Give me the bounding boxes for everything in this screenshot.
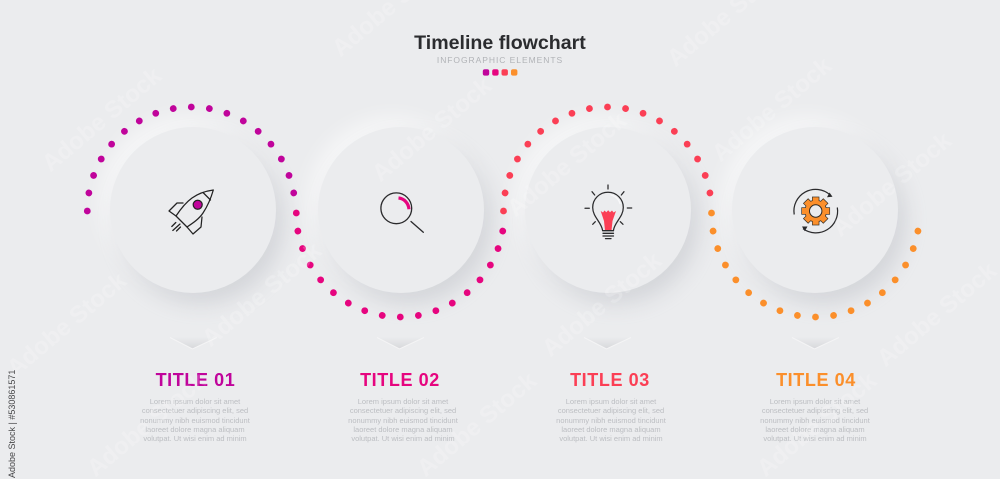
chevron [377, 338, 424, 349]
watermarks: Adobe Stock [82, 367, 212, 479]
step 2 [326, 130, 496, 443]
icon: light bulb [584, 184, 632, 240]
body text: laoreet dolore magna aliquam [765, 425, 865, 434]
title 04: TITLE 04 [776, 370, 856, 390]
step 1 [118, 130, 288, 443]
dotted arc 4 [708, 210, 922, 320]
watermarks: Adobe Stock [502, 107, 632, 222]
step 4 [740, 130, 910, 443]
body text [556, 397, 666, 443]
watermarks: Adobe Stock [707, 52, 837, 167]
body text: consectetuer adipiscing elit, sed [762, 406, 868, 415]
colour key squares [482, 69, 518, 76]
icon: gear with cycle arrows [793, 188, 838, 234]
subtitle: INFOGRAPHIC ELEMENTS [437, 55, 563, 65]
watermarks: Adobe Stock [2, 267, 132, 382]
body text [140, 397, 250, 443]
watermarks: Adobe Stock [367, 72, 497, 187]
body text [760, 397, 870, 443]
body text: nonummy nibh euismod tincidunt [140, 416, 250, 425]
step 3 [532, 130, 702, 443]
circle [110, 127, 276, 293]
circle [732, 127, 898, 293]
body text: volutpat. Ut wisi enim ad minim [559, 434, 663, 443]
watermarks: Adobe Stock [37, 62, 167, 177]
body text: volutpat. Ut wisi enim ad minim [143, 434, 247, 443]
body text: Lorem ipsum dolor sit amet [566, 397, 656, 406]
body text: Lorem ipsum dolor sit amet [770, 397, 860, 406]
title 01: TITLE 01 [156, 370, 235, 390]
dotted arc 1 [84, 104, 298, 214]
body text: Lorem ipsum dolor sit amet [358, 397, 448, 406]
body text: nonummy nibh euismod tincidunt [556, 416, 666, 425]
watermarks: Adobe Stock [827, 127, 957, 242]
body text: volutpat. Ut wisi enim ad minim [763, 434, 867, 443]
icon: magnifier [380, 192, 424, 233]
title: Timeline flowchart [414, 32, 586, 54]
chevron [170, 338, 217, 349]
body text: laoreet dolore magna aliquam [561, 425, 661, 434]
watermarks: Adobe Stock [412, 367, 542, 479]
dotted arc 3 [500, 104, 714, 214]
body text: volutpat. Ut wisi enim ad minim [351, 434, 455, 443]
body text: consectetuer adipiscing elit, sed [558, 406, 664, 415]
watermarks: Adobe Stock [872, 257, 1000, 372]
icon: rocket [168, 189, 214, 235]
title 03: TITLE 03 [570, 370, 650, 390]
title 02: TITLE 02 [360, 370, 440, 390]
body text: consectetuer adipiscing elit, sed [350, 406, 456, 415]
body text: Lorem ipsum dolor sit amet [150, 397, 240, 406]
chevron [792, 338, 839, 349]
body text: laoreet dolore magna aliquam [353, 425, 453, 434]
chevron [584, 338, 631, 349]
watermarks: Adobe Stock [752, 367, 882, 479]
dotted arc 2 [293, 210, 507, 320]
circle [525, 127, 691, 293]
body text: consectetuer adipiscing elit, sed [142, 406, 248, 415]
stock credit: Adobe Stock | #530861571 [6, 370, 16, 478]
circle [318, 127, 484, 293]
watermarks: Adobe Stock [537, 247, 667, 362]
body text: nonummy nibh euismod tincidunt [760, 416, 870, 425]
body text: nonummy nibh euismod tincidunt [348, 416, 458, 425]
body text: laoreet dolore magna aliquam [145, 425, 245, 434]
body text [348, 397, 458, 443]
watermarks: Adobe Stock [197, 237, 327, 352]
